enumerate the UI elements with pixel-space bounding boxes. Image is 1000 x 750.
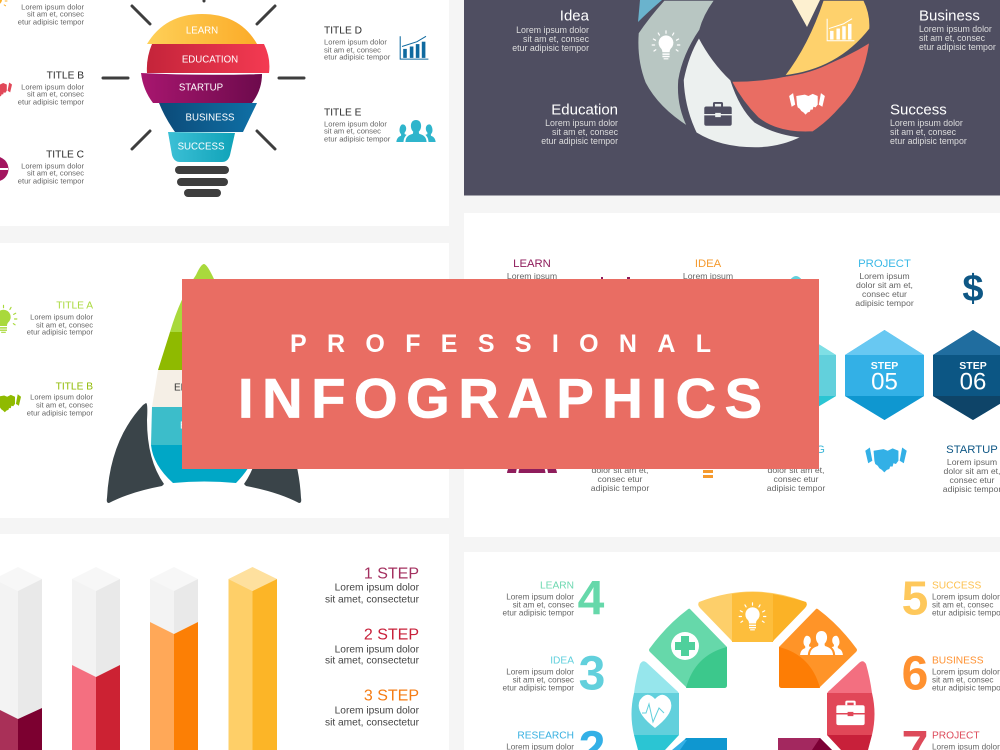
text block: 1 step: sit amet, consectetur — [325, 594, 420, 606]
text block: title D: etur adipisic tempor — [324, 52, 391, 62]
text block: startup: dolor sit am et, — [944, 466, 1000, 476]
text block: title A: Lorem ipsum dolor — [21, 2, 84, 12]
text block: lower column 2 — [591, 465, 649, 493]
text block: idea — [512, 8, 590, 53]
text block: learn — [503, 580, 574, 618]
icon: bulb base — [175, 166, 229, 197]
text block: learn: sit am et, consec — [513, 600, 574, 610]
icon: wheel bulb — [739, 603, 766, 630]
hexagon: step 06: STEP — [959, 360, 987, 372]
aperture segment: education — [683, 37, 802, 148]
rocket labels: BUSINESS — [180, 420, 231, 432]
text block: lower column 4: adipisic tempor — [767, 483, 825, 493]
text block: lower column 4: consec etur — [774, 474, 819, 484]
text block: 1 step — [325, 566, 420, 606]
banner title: INFOGRAPHICS — [238, 366, 762, 430]
aperture segment: blue — [638, 0, 662, 22]
icon: maroon people — [507, 445, 557, 473]
rocket segment: nose — [170, 264, 238, 332]
aperture segment: business — [784, 0, 870, 76]
text block: business: Business — [919, 8, 980, 24]
text block: title A: sit am et, consec — [27, 10, 84, 18]
text block: lower column 4 — [767, 444, 825, 493]
icon: dollar: $ — [962, 268, 984, 310]
icon: maroon pie — [0, 156, 8, 182]
column: project — [855, 258, 914, 308]
wheel segment: yellow top — [698, 592, 807, 642]
text block: research: RESEARCH — [517, 730, 574, 742]
text block: business: Lorem ipsum dolor — [932, 668, 1000, 676]
text block: 2 step — [325, 626, 420, 666]
panel: lightbulb infographic — [0, 0, 449, 226]
text block: startup: adipisic tempor — [943, 484, 1000, 494]
text block: idea: Lorem ipsum dolor — [516, 25, 589, 35]
bulb labels: SUCCESS — [178, 142, 225, 152]
text block: business: Lorem ipsum dolor — [919, 24, 992, 34]
text block: title B: etur adipisic tempor — [27, 408, 93, 418]
text block: title C — [18, 150, 84, 186]
text block: idea: IDEA — [550, 656, 574, 666]
hexagon: step 04 — [756, 330, 836, 420]
rocket segment: teal — [151, 407, 257, 445]
text block: 3 step: Lorem ipsum dolor — [335, 706, 420, 716]
text block: title C: TITLE C — [46, 150, 84, 160]
icon: growth chart — [400, 36, 428, 59]
text block: success: Lorem ipsum dolor — [932, 592, 1000, 602]
text block: business — [919, 8, 996, 52]
text block: title B: TITLE B — [56, 382, 93, 392]
text block: title A: etur adipisic tempor — [18, 18, 84, 26]
icon: blue handshake — [865, 447, 907, 472]
text block: idea: etur adipisic tempor — [503, 684, 574, 692]
icon: bulb rays — [103, 0, 304, 149]
text block: education: Education — [551, 102, 618, 118]
hexagon: step 05: STEP — [871, 360, 898, 372]
column: project: consec etur — [862, 289, 907, 299]
text block: 2 step: 2 STEP — [364, 626, 419, 644]
text block: title E: sit am et, consec — [324, 126, 381, 136]
text block: learn: Lorem ipsum dolor — [506, 592, 574, 602]
wheel segment: green — [649, 609, 727, 688]
bulb labels — [178, 26, 238, 152]
icon: handshake — [789, 93, 825, 115]
number 6: 6 — [902, 648, 928, 700]
text block: title B — [27, 382, 93, 418]
text block: lower column 4: dolor sit am et, — [768, 465, 824, 475]
bar 3 — [150, 567, 198, 750]
text block: business: sit am et, consec — [932, 676, 993, 684]
column: idea: Lorem ipsum — [683, 271, 733, 281]
text block: 3 step: sit amet, consectetur — [325, 718, 420, 728]
text block: idea: sit am et, consec — [513, 676, 574, 684]
text block: lower column 2: adipisic tempor — [591, 483, 649, 493]
text block: title B: TITLE B — [47, 70, 84, 82]
text block: title E: Lorem ipsum dolor — [324, 120, 387, 128]
icon: teal tip above banner — [790, 276, 802, 280]
text block: title E — [324, 108, 391, 144]
panel: rocket infographic — [0, 243, 449, 518]
banner — [182, 279, 819, 469]
icon: orange bulb base — [703, 470, 713, 478]
text block: 2 step: sit amet, consectetur — [325, 656, 420, 666]
text block: title B: Lorem ipsum dolor — [21, 82, 84, 92]
text block: lower column 4: PLANNING — [767, 444, 825, 456]
icon: green handshake — [0, 394, 21, 412]
bar 2 — [72, 567, 120, 750]
text block: title C: Lorem ipsum dolor — [21, 162, 84, 170]
rocket segment: green — [158, 332, 250, 370]
text block: title A: etur adipisic tempor — [27, 328, 93, 336]
text block: title E: TITLE E — [324, 108, 362, 118]
number 4: 4 — [578, 572, 605, 626]
bulb segment: startup — [141, 73, 262, 103]
text block: title B: Lorem ipsum dolor — [30, 392, 93, 402]
hexagon: step 06: 06 — [960, 368, 986, 396]
wheel segment: blue — [672, 738, 727, 750]
text block: title D: TITLE D — [324, 26, 362, 36]
text block: business: sit am et, consec — [919, 33, 986, 43]
wheel segment: cyan — [632, 661, 679, 750]
bar 4 — [228, 567, 277, 750]
text block: title B: sit am et, consec — [36, 400, 93, 410]
icon: red handshake — [0, 82, 12, 98]
bulb labels: BUSINESS — [186, 112, 235, 124]
text block: success: Success — [890, 102, 947, 118]
number 5: 5 — [902, 572, 928, 626]
bulb segment: business — [159, 103, 257, 132]
text block: 2 step: Lorem ipsum dolor — [335, 644, 420, 656]
column: learn — [507, 258, 557, 281]
text block: success: SUCCESS — [932, 580, 981, 592]
text block: lower column 2: dolor sit am et, — [592, 465, 648, 475]
rocket segment: cream — [152, 370, 256, 407]
text block: startup: Lorem ipsum — [947, 457, 997, 467]
text block: title A: sit am et, consec — [36, 320, 93, 330]
text block: learn: etur adipisic tempor — [503, 608, 574, 618]
text block: title A: TITLE A — [56, 300, 93, 312]
text block: education: sit am et, consec — [552, 127, 619, 137]
text block: success: etur adipisic tempor — [890, 136, 967, 146]
icon: lime bulb — [0, 305, 17, 333]
text block: business: BUSINESS — [932, 656, 984, 666]
aperture segment: cream — [792, 0, 820, 27]
icon: idea bulb — [652, 31, 680, 59]
bulb segment: learn — [147, 14, 257, 44]
text block: success — [890, 102, 967, 146]
icon: orange bulb — [0, 0, 7, 13]
rocket wing: left — [107, 403, 164, 503]
bar 1 — [0, 567, 42, 750]
text block: idea — [503, 656, 574, 692]
column: project: dolor sit am et, — [856, 280, 913, 290]
icon: wheel people — [800, 631, 843, 655]
column: project: Lorem ipsum — [859, 271, 910, 281]
text block: title D — [324, 26, 391, 62]
icon: maroon tips above banner — [601, 277, 630, 280]
number 3: 3 — [579, 648, 605, 700]
bulb labels: LEARN — [186, 26, 218, 36]
rocket labels — [174, 382, 232, 432]
text block: 3 step — [325, 688, 420, 728]
icon: heart — [639, 695, 671, 728]
aperture segment: idea — [638, 0, 715, 127]
rocket wing: right — [244, 403, 301, 503]
text block: idea: etur adipisic tempor — [512, 43, 589, 53]
icon: wheel briefcase — [836, 701, 865, 725]
column: learn: Lorem ipsum — [507, 271, 557, 281]
rocket segment: blue — [151, 445, 257, 483]
text block: education — [541, 102, 619, 146]
text block: title D: Lorem ipsum dolor — [324, 38, 387, 46]
text block: project: PROJECT — [932, 730, 980, 742]
bulb segment: education — [147, 44, 269, 73]
text block: idea: sit am et, consec — [523, 34, 590, 44]
column: idea: IDEA — [695, 258, 722, 270]
panel: hexagon steps — [464, 213, 1000, 537]
text block: startup: STARTUP — [946, 444, 998, 456]
wheel segment: orange — [779, 609, 857, 688]
text block: 1 step: Lorem ipsum dolor — [335, 582, 420, 594]
column: learn: LEARN — [513, 258, 551, 270]
text block: 3 step: 3 STEP — [364, 688, 419, 704]
text block: title B: etur adipisic tempor — [18, 98, 84, 106]
text block: startup: consec etur — [950, 475, 995, 485]
text block: title B: sit am et, consec — [27, 90, 84, 98]
column: idea — [683, 258, 733, 281]
bulb labels: EDUCATION — [182, 54, 238, 66]
text block: 1 step: 1 STEP — [364, 566, 419, 582]
text block: title B — [18, 70, 84, 106]
banner subtitle: PROFESSIONAL — [290, 330, 711, 358]
column: project: adipisic tempor — [855, 298, 914, 308]
text block: success: Lorem ipsum dolor — [890, 118, 963, 128]
text block: title A — [27, 300, 93, 336]
icon: team — [396, 120, 436, 142]
hexagon: step 06 — [933, 330, 1000, 420]
text block: learn: LEARN — [540, 580, 574, 592]
text block: research — [506, 730, 574, 750]
text block: startup — [943, 444, 1000, 494]
text block: success — [932, 580, 1000, 618]
text block: title A — [18, 2, 84, 26]
text block: title C: sit am et, consec — [27, 168, 84, 178]
panel: circular segments — [464, 552, 1000, 750]
hexagon: step 05: 05 — [871, 368, 898, 396]
text block: lower column 2: consec etur — [598, 474, 643, 484]
bulb segment: success — [168, 132, 235, 162]
icon: briefcase — [704, 102, 732, 126]
text block: success: sit am et, consec — [932, 600, 993, 610]
column: project: PROJECT — [858, 258, 911, 270]
text block: title E: etur adipisic tempor — [324, 134, 391, 144]
panel: isometric bars — [0, 534, 449, 750]
aperture segment: success — [731, 42, 870, 132]
text block: business: etur adipisic tempor — [919, 42, 996, 52]
text block: idea: Lorem ipsum dolor — [506, 668, 574, 676]
bulb labels: STARTUP — [179, 82, 223, 94]
text block: title D: sit am et, consec — [324, 46, 381, 54]
text block: title A: Lorem ipsum dolor — [30, 312, 93, 322]
text block: project — [932, 730, 1000, 750]
panel: dark aperture infographic — [464, 0, 1000, 196]
icon: plus badge — [671, 632, 699, 660]
text block: education: etur adipisic tempor — [541, 136, 618, 146]
text block: education: Lorem ipsum dolor — [545, 118, 618, 128]
text block: business — [932, 656, 1000, 692]
hexagon: step 05 — [845, 330, 924, 420]
wheel segment: maroon — [778, 738, 832, 750]
wheel segment: red — [827, 661, 874, 750]
text block: success: sit am et, consec — [890, 127, 957, 137]
icon: business chart — [827, 19, 854, 41]
text block: title C: etur adipisic tempor — [18, 176, 84, 186]
text block: idea: Idea — [560, 8, 590, 24]
rocket labels: EDUCATION — [174, 382, 232, 394]
